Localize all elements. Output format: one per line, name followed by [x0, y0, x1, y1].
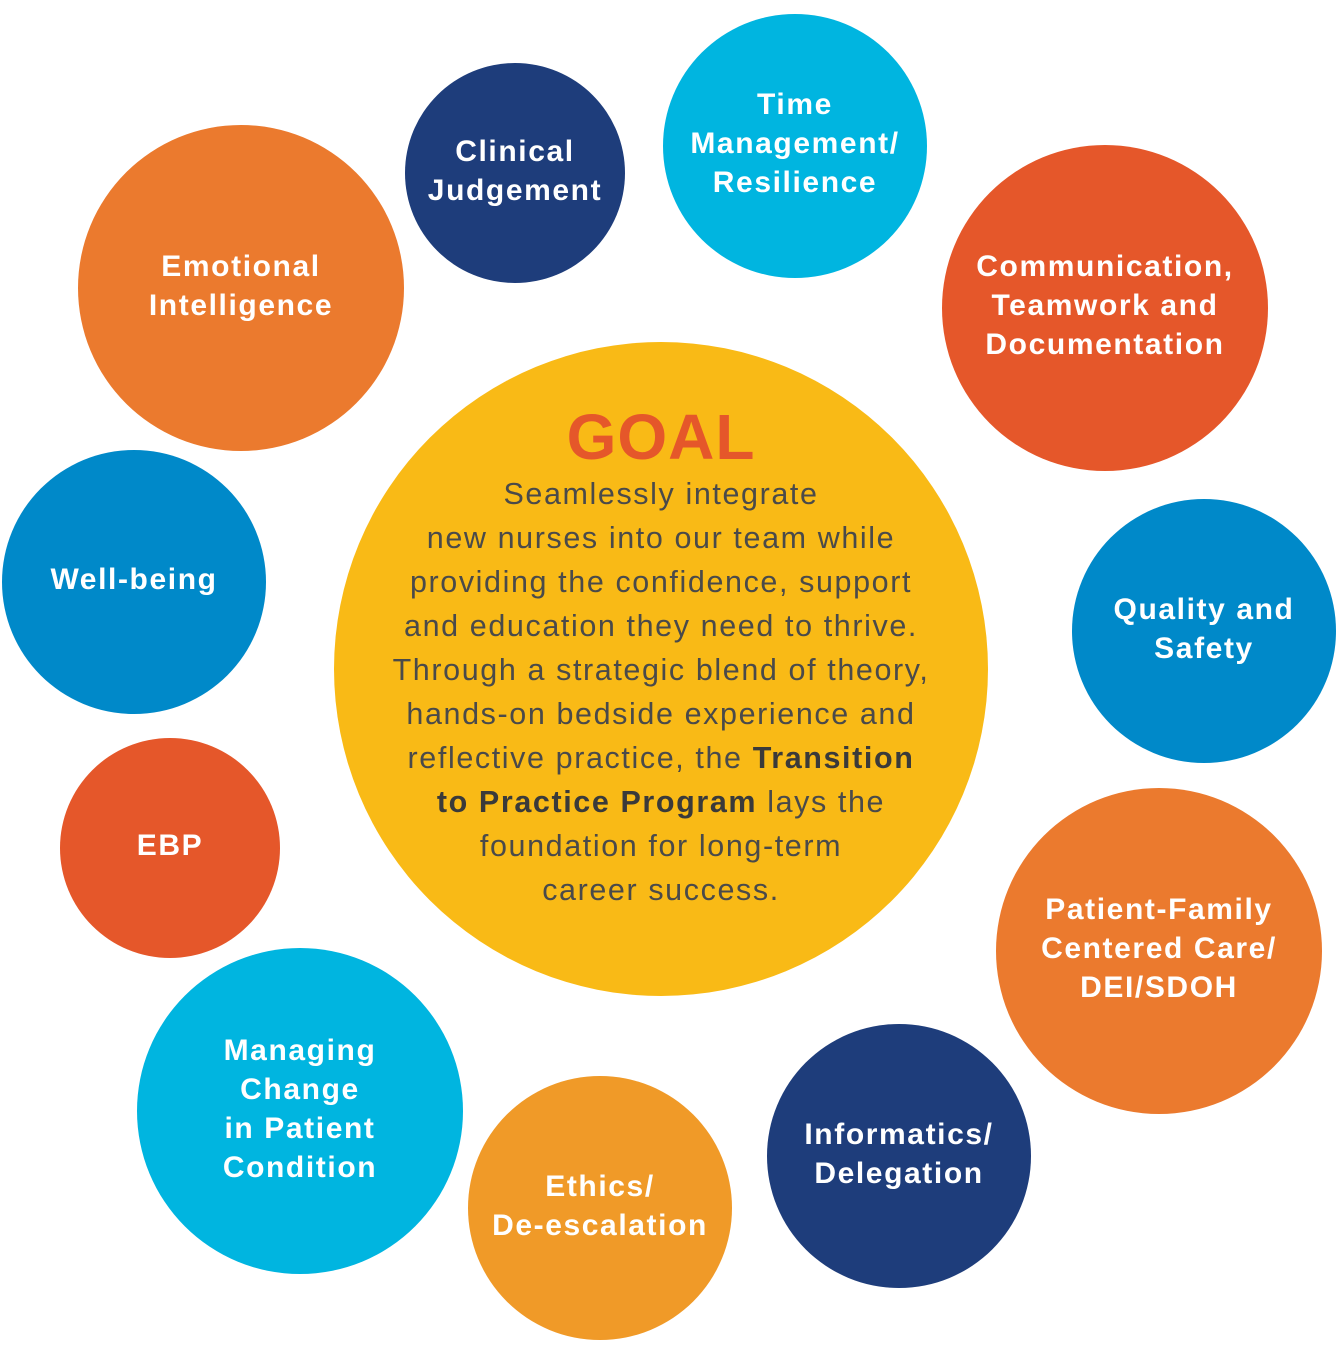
circle: Communication: Documentation — [985, 328, 1225, 361]
circle: Emotional Intelligence — [78, 125, 404, 451]
circle: Time Management/Resilience: Time — [757, 88, 833, 121]
text block: goal description: Through a strategic blend of theory, — [393, 653, 929, 687]
circle: Managing Change: in Patient — [224, 1112, 376, 1144]
circle: Patient-Family: Patient-Family — [1045, 893, 1273, 926]
circle: Communication: Communication, — [976, 250, 1234, 283]
circle: Patient-Family: DEI/SDOH — [1080, 971, 1238, 1004]
text block: goal description: to Practice Program lays the — [437, 785, 885, 819]
text block: goal description: Seamlessly integrate — [503, 477, 819, 511]
circle: Time Management/Resilience — [663, 14, 927, 278]
circle: Informatics: Informatics/ — [804, 1118, 994, 1150]
circle: Patient-Family — [996, 788, 1322, 1114]
text block: goal description: foundation for long-term — [480, 829, 842, 863]
circle: EBP — [60, 738, 280, 958]
circle: Well-being: Well-being — [50, 563, 218, 596]
circle: Clinical Judgement: Clinical — [455, 134, 575, 168]
circle: Emotional Intelligence: Emotional — [161, 250, 321, 282]
circle: Quality and Safety: Quality and — [1114, 592, 1294, 626]
circle: Time Management/Resilience: Resilience — [713, 166, 877, 199]
circle: Communication: Teamwork and — [991, 289, 1219, 322]
circle: Ethics: Ethics/ — [545, 1170, 655, 1202]
circle: Managing Change: Change — [240, 1072, 360, 1106]
text block: goal description — [393, 477, 929, 907]
circle: Clinical Judgement: Judgement — [428, 174, 602, 206]
text block: goal description: hands-on bedside experience and — [406, 697, 916, 731]
text block: goal description: providing the confidence, support — [410, 565, 912, 599]
circle: Patient-Family: Centered Care/ — [1041, 932, 1277, 965]
circle: Ethics — [468, 1076, 732, 1340]
circle: Managing Change: Condition — [223, 1150, 377, 1184]
circle: Informatics: Delegation — [814, 1156, 984, 1190]
text block: goal description: and education they need to thrive. — [404, 609, 918, 643]
circle: Clinical Judgement — [405, 63, 625, 283]
circle: Managing Change: Managing — [224, 1034, 376, 1066]
circle: Time Management/Resilience: Management/ — [690, 127, 900, 160]
circle: Ethics: De-escalation — [492, 1208, 708, 1242]
circle: Well-being — [2, 450, 266, 714]
circle: Managing Change — [137, 948, 463, 1274]
circle: Emotional Intelligence: Intelligence — [149, 288, 333, 322]
text block: goal description: career success. — [542, 873, 780, 907]
text block: goal description: reflective practice, the Transition — [408, 741, 914, 775]
circle: Quality and Safety — [1072, 499, 1336, 763]
circle: Informatics — [767, 1024, 1031, 1288]
text block: goal description: new nurses into our team while — [427, 521, 895, 555]
heading: GOAL: GOAL — [567, 401, 755, 473]
circle: EBP: EBP — [137, 829, 203, 862]
circle: Communication — [942, 145, 1268, 471]
circle: Quality and Safety: Safety — [1154, 632, 1254, 664]
panel: goal circle — [334, 342, 988, 996]
